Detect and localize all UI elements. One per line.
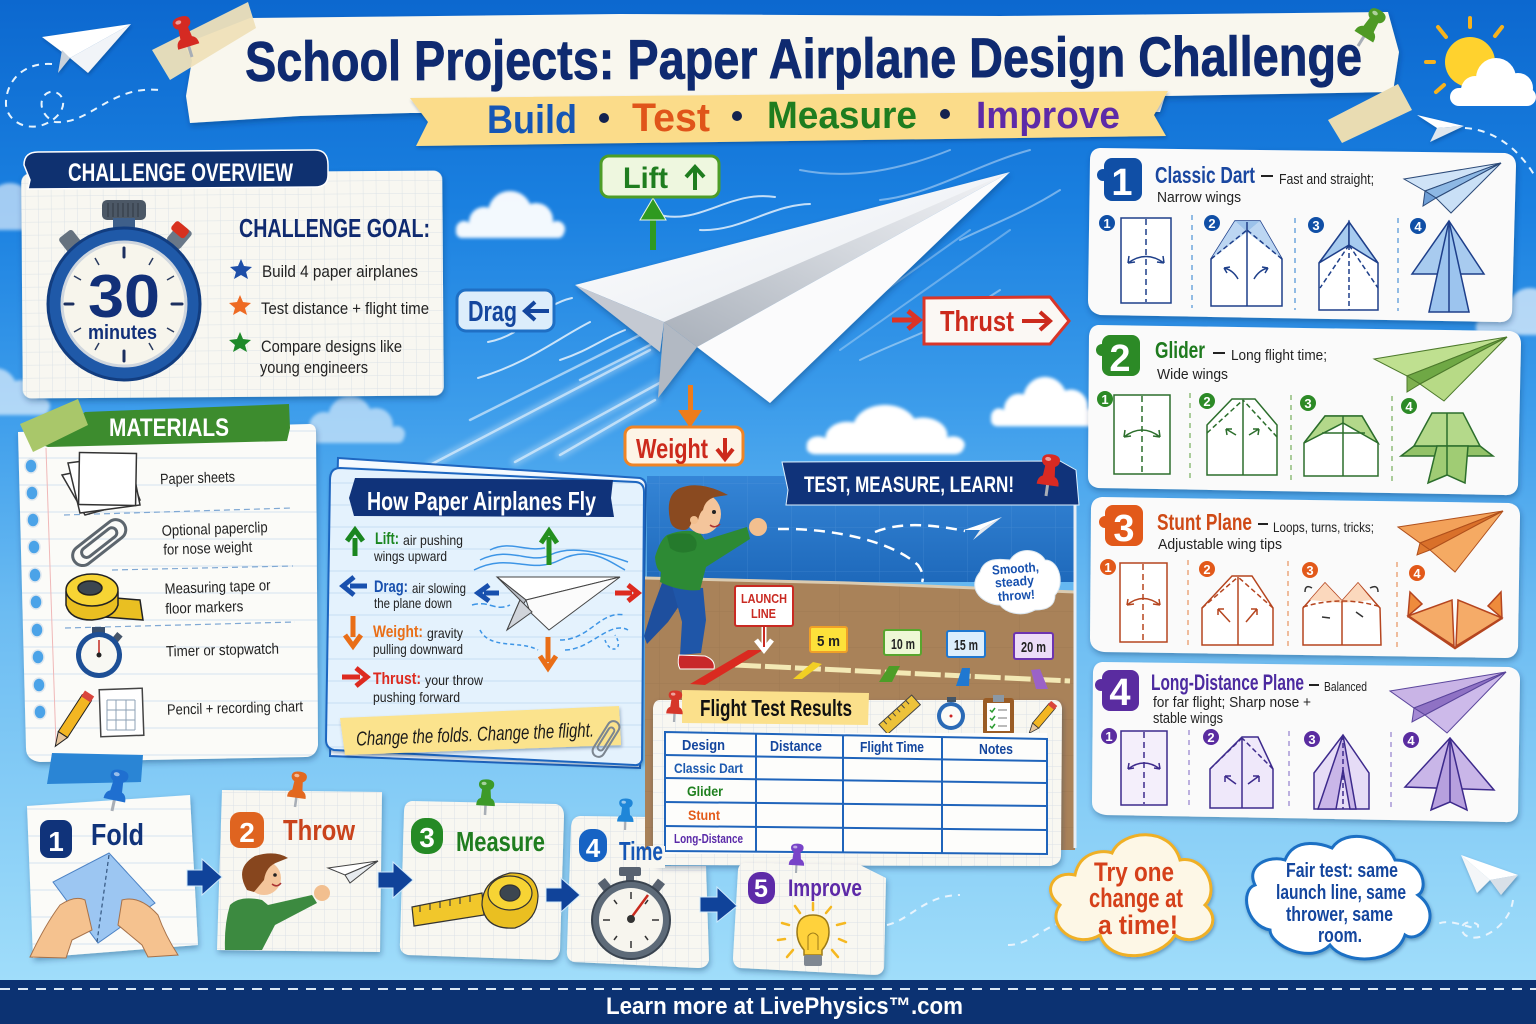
sticky note: Change the folds. Change the flight. [356, 719, 594, 751]
dashed throw path [778, 525, 965, 582]
folding step 3 [1304, 731, 1369, 809]
title: long-distance plane: Long-Distance Plane [1151, 670, 1304, 695]
badge 2: 2 [1109, 338, 1131, 380]
arrow: thrust [892, 311, 919, 329]
label: thrust [924, 297, 1069, 344]
explanation: weight [345, 616, 463, 657]
margin line [46, 448, 56, 745]
thought bubble: smooth steady throw [975, 551, 1060, 614]
big paper airplane [575, 172, 1010, 403]
folding step 4 [1401, 398, 1493, 483]
launch line marker [690, 650, 763, 685]
icon: paper plane bottom right [1461, 855, 1518, 895]
icon: paper plane top left [42, 24, 131, 73]
panel: challenge overview [21, 150, 444, 398]
folding step 1: 1 [1101, 392, 1109, 407]
divider [1188, 730, 1190, 808]
plane card 4: long-distance plane [1092, 662, 1520, 822]
label: weight: Weight [636, 433, 708, 464]
badge 4 [579, 829, 607, 863]
callout: fair test: thrower, same [1286, 904, 1393, 926]
table row labels [674, 760, 743, 846]
badge 3: 3 [1113, 508, 1135, 550]
explanation: thrust [342, 668, 484, 705]
label: time: Time [619, 836, 663, 866]
floor tape line [735, 665, 1070, 681]
folding step 3: 3 [1308, 732, 1316, 747]
badge 4: 4 [586, 833, 601, 863]
pin: orange step 2 [286, 770, 309, 808]
folding step 2 [1199, 561, 1273, 645]
explanation: drag: air slowing [412, 580, 466, 596]
badge 1 [40, 820, 72, 858]
explanation: weight: gravity [427, 625, 463, 641]
distance marker: 15 m: 15 m [954, 637, 978, 654]
explanation: thrust: Thrust: [373, 669, 421, 688]
goal: compare: Compare designs like [261, 337, 402, 356]
explanation: lift: wings upward [373, 548, 447, 564]
folding step 2: 2 [1208, 216, 1216, 231]
folding step 4: 4 [1405, 399, 1413, 414]
divider [1294, 218, 1296, 310]
panel: materials [18, 399, 318, 784]
table header row [682, 737, 1013, 758]
callout: try one change: a time! [1098, 910, 1178, 940]
table header row: Design [682, 737, 725, 754]
icon: boy throwing [225, 853, 330, 950]
folding step 2: 2 [1203, 394, 1211, 409]
badge 3 [411, 818, 443, 854]
plane illustration: green [1374, 337, 1507, 401]
pin: green top right [1349, 5, 1390, 52]
step card 3: measure [400, 801, 564, 960]
text: measuring tape [164, 577, 272, 618]
folding step 2 [1199, 393, 1277, 475]
label: throw: Throw [283, 815, 355, 847]
title: glider [1155, 337, 1327, 383]
pin: green step 3 [476, 779, 496, 815]
divider [1290, 395, 1292, 481]
divider [1189, 393, 1191, 480]
tape: green [20, 399, 88, 452]
goal: build: Build 4 paper airplanes [262, 262, 418, 281]
badge 1: 1 [48, 826, 64, 857]
dashed path to bubble [887, 895, 1065, 945]
icon: flying plane [964, 517, 1002, 540]
icon: measuring tape [412, 873, 538, 928]
title: long-distance plane: for far flight; Sharp nose + [1153, 694, 1311, 711]
header ribbon: materials [45, 404, 290, 447]
title: long-distance plane [1151, 670, 1367, 727]
explanation: drag [343, 577, 466, 611]
subtitle word: Measure: Measure [767, 95, 917, 137]
folding step 4: 4 [1414, 219, 1422, 234]
table header row: Distance [770, 738, 822, 755]
table row labels: Long-Distance [674, 831, 743, 846]
text: paperclip: Optional paperclip [161, 519, 268, 540]
label: lift [601, 156, 719, 197]
arrow: lift [640, 198, 666, 250]
callout: try one change [1051, 835, 1213, 956]
folding step 3: 3 [1304, 396, 1312, 411]
pin: red on card [666, 690, 684, 722]
distance marker: 5 m [793, 627, 847, 679]
callout: fair test: launch line, same [1276, 882, 1406, 904]
footer [0, 980, 1536, 1024]
callout: fair test: Fair test: same [1286, 860, 1398, 882]
plane card 3: stunt plane [1090, 497, 1520, 658]
folding step 3: 3 [1312, 218, 1320, 233]
table header row: Flight Time [860, 739, 924, 756]
callout: fair test: room. [1318, 925, 1362, 947]
plane illustration: blue [1404, 163, 1501, 213]
icon: stopwatch [937, 697, 965, 730]
icon: 30 minute stopwatch [48, 200, 200, 380]
icon: pencil [1026, 701, 1057, 736]
goal: test [229, 295, 429, 318]
icon: timer [76, 627, 123, 678]
label: measure: Measure [456, 826, 545, 857]
icon: paper plane top right [1417, 115, 1464, 142]
label: improve: Improve [788, 875, 862, 902]
text: paperclip [161, 519, 269, 559]
label: drag: Drag [468, 296, 517, 328]
goal: compare [229, 332, 402, 377]
divider [1187, 560, 1189, 645]
table row labels: Classic Dart [674, 760, 743, 776]
badge 2: 2 [239, 817, 255, 848]
title banner [184, 12, 1399, 123]
footer: Learn more at LivePhysics™.com [606, 993, 963, 1020]
divider [1397, 218, 1399, 311]
thought bubble: smooth steady throw: steady [994, 573, 1035, 590]
subtitle word: Build: Build [487, 98, 577, 142]
arrow: measure to time [546, 878, 580, 912]
plane card 2: glider [1088, 325, 1521, 495]
goal: build [230, 259, 418, 281]
text: measuring tape: Measuring tape or [164, 577, 271, 598]
explanation: lift [347, 529, 463, 564]
text: paperclip: for nose weight [163, 539, 253, 559]
title: classic dart [1155, 162, 1374, 206]
distance marker: 20 m [1014, 633, 1053, 689]
distance marker: 15 m [947, 631, 985, 686]
icon: clipboard [983, 695, 1014, 735]
explanation: drag: Drag: [374, 577, 408, 596]
folding step 3 [1302, 562, 1381, 645]
folding step 4 [1403, 732, 1494, 810]
heading: challenge goal: CHALLENGE GOAL: [239, 213, 430, 243]
binder holes [25, 459, 46, 719]
distance marker: 10 m: 10 m [891, 636, 915, 653]
icon: recording chart [99, 688, 144, 737]
heading: flight test results [682, 690, 869, 725]
title: stunt plane: Loops, turns, tricks; [1273, 519, 1374, 535]
thought bubble: smooth steady throw: throw! [997, 587, 1035, 604]
icon: sun and cloud [1426, 18, 1536, 106]
distance marker: 5 m: 5 m [817, 633, 840, 650]
divider [1288, 731, 1290, 809]
dashed path bottom right [1436, 900, 1513, 938]
sticky note [340, 706, 621, 755]
label: drag [457, 290, 554, 331]
step card 4: time [567, 816, 709, 968]
thought bubble: smooth steady throw: Smooth, [991, 559, 1039, 578]
folding step 2 [1203, 729, 1273, 808]
badge 1: 1 [1111, 162, 1133, 204]
callout: try one change: change at [1089, 883, 1183, 913]
diagram: four forces on a plane [472, 531, 638, 668]
text: measuring tape: floor markers [165, 598, 244, 618]
divider [1396, 562, 1398, 647]
divider [1287, 561, 1289, 646]
sign: launch line: LAUNCH [741, 591, 787, 606]
folding step 1: 1 [1103, 216, 1111, 231]
wall [647, 476, 1075, 582]
explanation: thrust: pushing forward [373, 689, 460, 705]
heading: flight test results: Flight Test Results [700, 695, 852, 721]
boy throwing plane [644, 485, 767, 669]
separator [940, 109, 950, 119]
goal: compare: young engineers [260, 358, 368, 377]
icon: stopwatch [592, 867, 670, 959]
title: classic dart: Fast and straight; [1279, 171, 1374, 188]
subtitle word: Improve: Improve [976, 95, 1120, 137]
separator [599, 113, 609, 123]
plane card 1: classic dart [1088, 148, 1516, 322]
icon: paperclip [69, 516, 130, 570]
title: glider: Glider [1155, 337, 1205, 363]
explanation: lift: Lift: [375, 529, 399, 548]
badge 4: 4 [1109, 672, 1131, 714]
icon: lightbulb [778, 903, 846, 966]
folding step 4 [1410, 218, 1484, 312]
sign: launch line: LINE [751, 606, 776, 621]
subtitle ribbon [410, 91, 1168, 146]
pin: blue step 4 [617, 798, 634, 830]
header: challenge overview: CHALLENGE OVERVIEW [68, 159, 293, 187]
plane illustration: purple [1390, 672, 1506, 733]
explanation: weight: pulling downward [373, 641, 463, 657]
header: how paper airplanes fly: How Paper Airplanes Fly [367, 486, 596, 516]
label: lift: Lift [623, 162, 668, 195]
step card 1: fold [27, 795, 198, 958]
callout: try one change: Try one [1094, 857, 1174, 887]
icon: paper sheets [62, 453, 140, 515]
table row labels: Stunt [688, 807, 720, 823]
title: classic dart: Narrow wings [1157, 189, 1241, 206]
table header row: Notes [979, 741, 1013, 758]
step card 5: improve [733, 863, 886, 975]
badge 2 [1096, 335, 1140, 380]
folding step 4: 4 [1413, 566, 1421, 581]
folding step 1 [1101, 728, 1167, 805]
tape: blue [47, 753, 143, 784]
dashed flight path top right [1465, 128, 1536, 178]
plane illustration: orange [1398, 511, 1503, 572]
separator [732, 111, 742, 121]
text: recording chart: Pencil + recording chart [167, 698, 304, 719]
badge 5 [748, 872, 775, 904]
pin: blue step 1 [101, 768, 131, 813]
folding step 1 [1099, 215, 1171, 303]
icon: 30 minute stopwatch: 30 [88, 263, 160, 330]
folding step 1: 1 [1105, 729, 1113, 744]
tape: top left [152, 2, 256, 80]
goal: test: Test distance + flight time [261, 299, 429, 318]
text: timer: Timer or stopwatch [166, 641, 279, 660]
folding step 2 [1204, 215, 1282, 306]
arrow: weight [678, 385, 702, 428]
distance marker: 10 m [879, 630, 921, 682]
distance marker: 20 m: 20 m [1021, 639, 1046, 656]
icon: measuring tape [66, 574, 143, 620]
folding step 3 [1300, 395, 1378, 476]
folding step 4 [1408, 565, 1502, 648]
title: stunt plane: Stunt Plane [1157, 509, 1252, 535]
sign: launch line [735, 586, 793, 650]
badge 5: 5 [754, 875, 768, 903]
pin: red [1035, 453, 1063, 498]
divider [1191, 215, 1193, 308]
divider [1391, 396, 1393, 483]
text: paper sheets: Paper sheets [160, 469, 235, 488]
header ribbon: materials: MATERIALS [109, 414, 229, 442]
pin: purple step 5 [788, 843, 805, 873]
clouds [0, 183, 1536, 454]
results table [665, 732, 1047, 854]
arrow: time to improve [700, 887, 737, 922]
title: stunt plane [1157, 509, 1374, 553]
badge 3: 3 [419, 822, 435, 853]
folding step 4: 4 [1407, 733, 1415, 748]
icon: paperclip on note [590, 719, 622, 759]
folding step 3 [1308, 217, 1378, 310]
card: flight test results [653, 690, 1062, 866]
badge 2 [230, 812, 264, 848]
header: test measure learn [782, 461, 1079, 505]
icon: pencil [51, 690, 94, 749]
pin: red top left [169, 14, 203, 60]
divider [1390, 732, 1392, 811]
title: classic dart: Classic Dart [1155, 162, 1255, 188]
label: fold: Fold [91, 817, 144, 852]
icon: 30 minute stopwatch: minutes [88, 322, 157, 344]
title: long-distance plane: Balanced [1324, 679, 1367, 694]
folding step 3: 3 [1306, 563, 1314, 578]
folding step 1 [1100, 559, 1167, 642]
panel: how paper airplanes fly [326, 458, 646, 768]
icon: ruler [879, 695, 920, 734]
dashed flight path top left [6, 64, 160, 127]
subtitle word: Test: Test [632, 96, 710, 140]
arrow: throw to measure [378, 862, 413, 898]
wind streaks [430, 150, 1060, 465]
folding step 2: 2 [1207, 730, 1215, 745]
header: challenge overview [24, 150, 328, 189]
badge 4 [1095, 670, 1139, 714]
title: glider: Wide wings [1157, 366, 1228, 383]
explanation: weight: Weight: [373, 622, 423, 641]
callout: fair test [1247, 836, 1430, 959]
folding step 1: 1 [1104, 560, 1112, 575]
badge 3 [1099, 505, 1143, 550]
dashed separators [64, 508, 295, 628]
icon: small plane [328, 861, 378, 883]
header: how paper airplanes fly [349, 478, 614, 517]
explanation: lift: air pushing [403, 532, 463, 548]
folding step 1 [1097, 391, 1170, 474]
icon: folded paper and hands [30, 853, 178, 958]
title: long-distance plane: stable wings [1153, 710, 1223, 727]
explanation: drag: the plane down [374, 595, 452, 611]
header: test measure learn: TEST, MEASURE, LEARN! [804, 472, 1014, 497]
step card 2: throw [217, 790, 382, 952]
label: thrust: Thrust [940, 306, 1014, 338]
arrow: fold to throw [187, 859, 222, 895]
badge 1 [1097, 158, 1142, 204]
folding step 2: 2 [1203, 562, 1211, 577]
table row labels: Glider [687, 783, 723, 799]
title: stunt plane: Adjustable wing tips [1158, 536, 1282, 553]
label: weight [625, 427, 743, 465]
tape: top right [1328, 84, 1412, 143]
explanation: thrust: your throw [425, 672, 484, 688]
title: glider: Long flight time; [1231, 347, 1327, 364]
floor [645, 578, 1075, 850]
